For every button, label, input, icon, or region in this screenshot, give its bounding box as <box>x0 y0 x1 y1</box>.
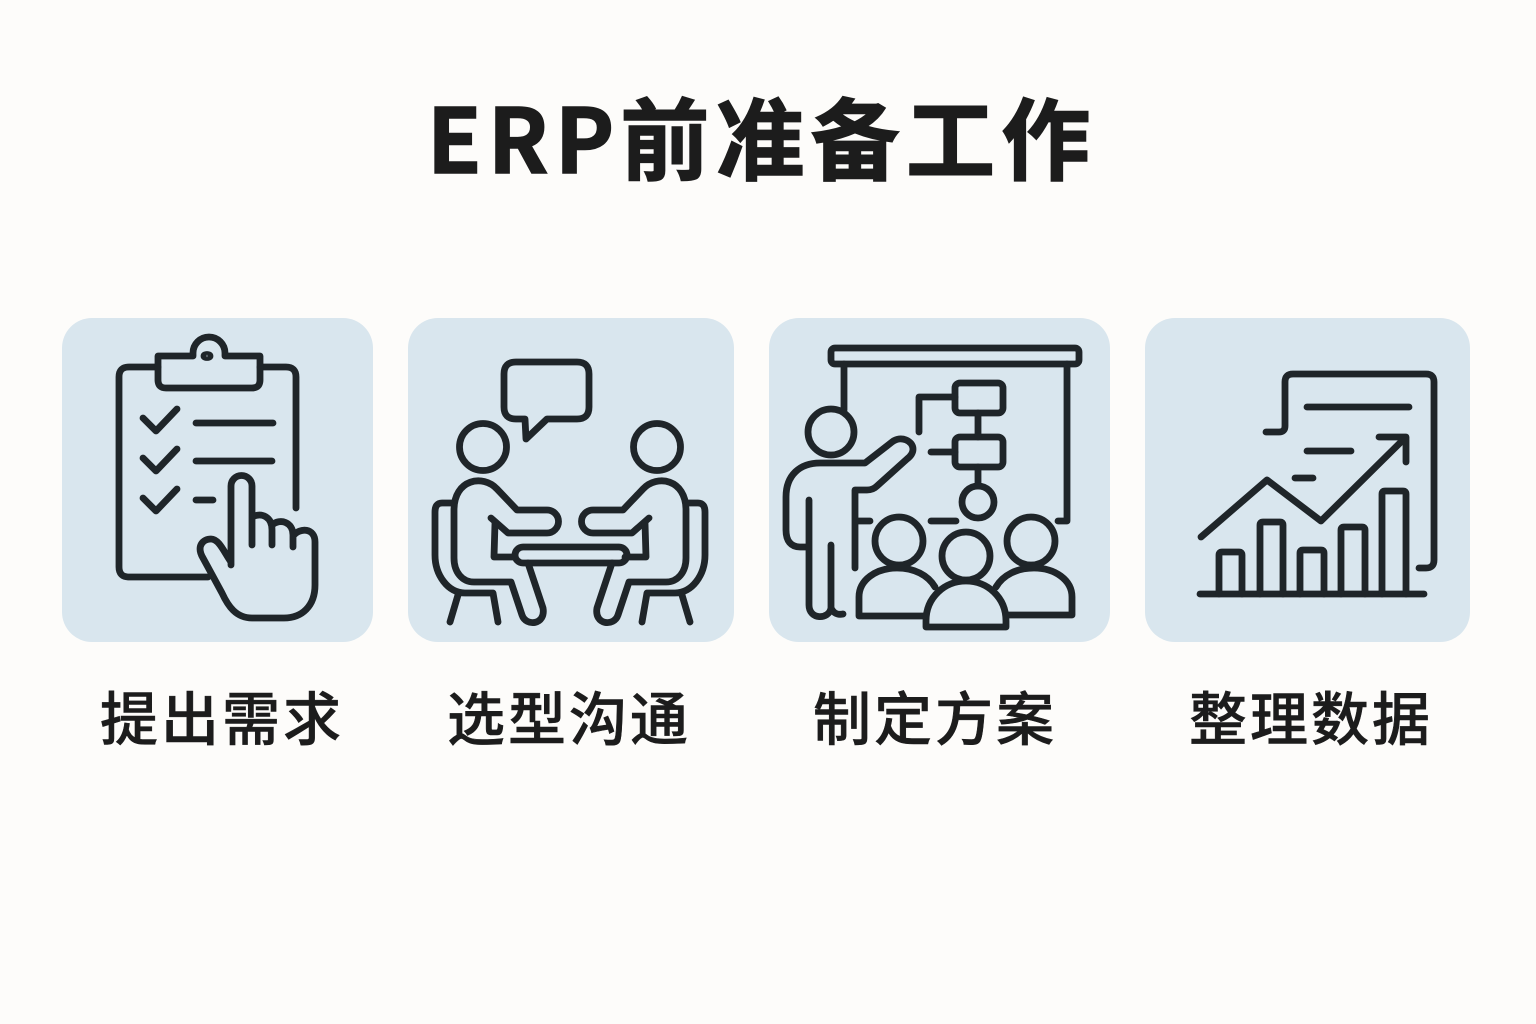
title: ERP前准备工作 <box>427 70 1096 199</box>
label: selection: 选型沟通 <box>447 673 691 757</box>
label: requirements: 提出需求 <box>100 673 344 757</box>
panel: data background <box>1145 318 1470 642</box>
icon: two people talking at a table <box>435 362 705 623</box>
icon: document with rising chart <box>1200 374 1434 594</box>
label: data: 整理数据 <box>1189 673 1433 757</box>
panel: plan background <box>769 318 1110 642</box>
label: plan: 制定方案 <box>813 673 1057 757</box>
icon: presenter with flowchart and audience <box>786 348 1079 627</box>
panel: requirements background <box>62 318 373 642</box>
panel: selection background <box>408 318 734 642</box>
icon: clipboard with pointing hand <box>119 337 315 618</box>
